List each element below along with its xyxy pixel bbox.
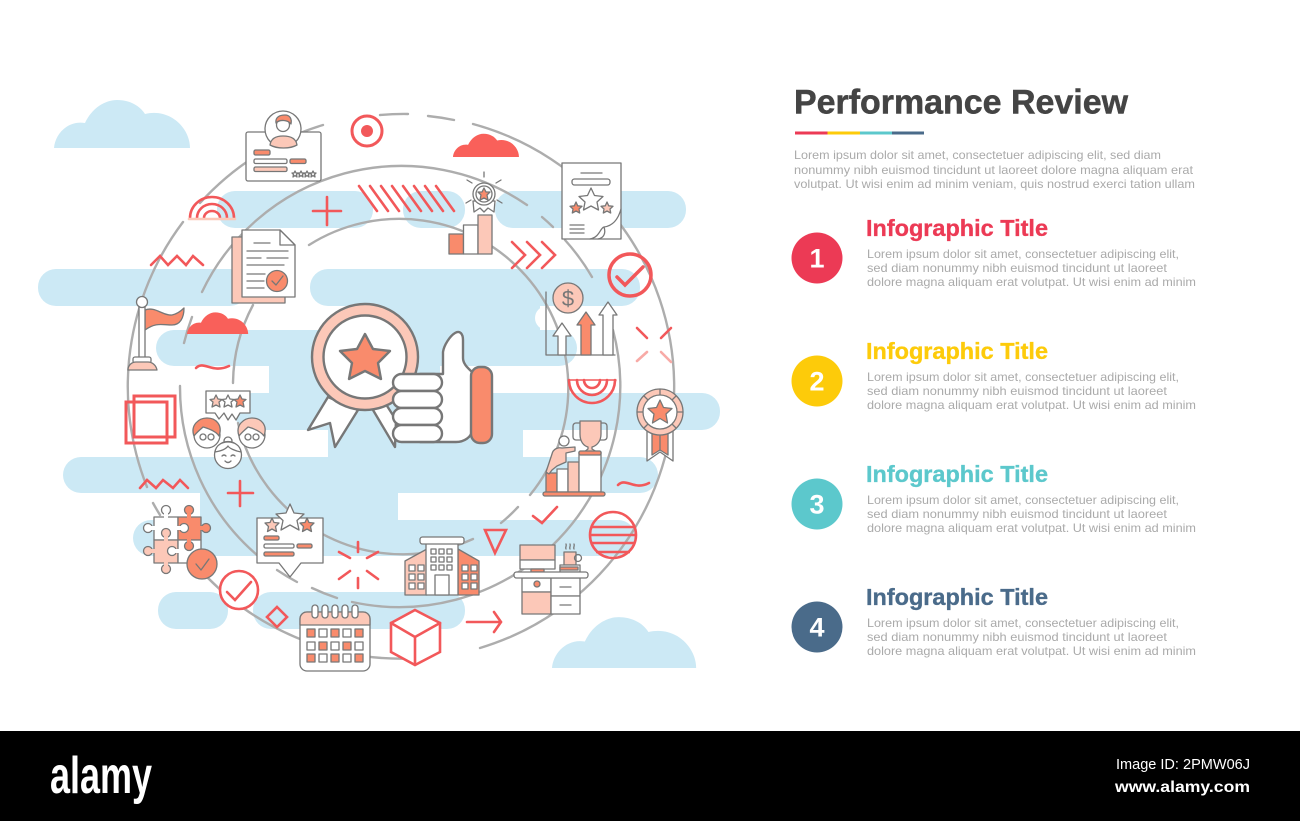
intro paragraph: Lorem ipsum dolor sit amet, consectetuer adipiscing elit, sed diam (794, 148, 1161, 162)
number badge 2: 2 (809, 366, 825, 396)
item 1 text: sed diam nonummy nibh euismod tincidunt ut laoreet (867, 261, 1168, 275)
icon: zigzag top (151, 256, 203, 265)
white cut-out bars (150, 306, 655, 520)
item 4 title: Infographic Title (866, 584, 1048, 610)
item 1 (792, 215, 1196, 289)
item 1 text: dolore magna aliquam erat volutpat. Ut wisi enim ad minim (867, 275, 1196, 289)
icon: profile card (246, 111, 321, 181)
item 2 (792, 338, 1196, 412)
number badge 1: 1 (809, 244, 825, 274)
number badge 3: 3 (809, 490, 825, 520)
footer band (0, 731, 1300, 821)
number badge 4 (792, 602, 842, 652)
icon: arrow (467, 612, 501, 632)
item 2 text (867, 370, 1196, 412)
item 3 text: dolore magna aliquam erat volutpat. Ut wisi enim ad minim (867, 521, 1196, 535)
badge medal (312, 304, 418, 410)
footer logo: alamy (50, 747, 152, 805)
icon: trophy podium (543, 421, 607, 496)
thumbs up hand (393, 332, 492, 443)
icon: growth chart with coin: $ (562, 286, 574, 311)
number badge 3 (792, 478, 842, 530)
icon: office building (405, 537, 479, 595)
heading underline (795, 132, 924, 134)
icon: office desk (514, 544, 588, 614)
item 2 text: sed diam nonummy nibh euismod tincidunt ut laoreet (867, 384, 1168, 398)
icon: sparkle burst (339, 542, 378, 588)
icon: zigzag bottom (140, 480, 188, 488)
icon: growth chart with coin (546, 283, 617, 355)
cloud: top left (54, 100, 190, 148)
icon: tilde left (196, 365, 229, 369)
icon: diagonal hatching (359, 186, 454, 211)
item 1 title: Infographic Title (866, 215, 1048, 241)
icon: chevrons (512, 242, 555, 268)
intro paragraph (794, 148, 1195, 191)
icon: squares (126, 396, 175, 443)
item 4 text: dolore magna aliquam erat volutpat. Ut wisi enim ad minim (867, 644, 1196, 658)
item 3 text: Lorem ipsum dolor sit amet, consectetuer adipiscing elit, (867, 493, 1179, 507)
cloud: bottom right (552, 617, 696, 668)
icon: striped circle (590, 512, 636, 558)
number badge 4: 4 (809, 612, 825, 642)
icon: diamond (267, 607, 287, 627)
icon: award with bars (449, 172, 502, 254)
background blue bars (38, 191, 720, 629)
icon: puzzle (144, 506, 217, 579)
icon: rainbow arcs (189, 197, 235, 219)
icon: red cloud left (187, 312, 248, 334)
icon: check circle bottom (220, 571, 258, 609)
icon: check mark (533, 507, 557, 523)
icon: certificate (562, 163, 621, 239)
icon: tilde right (618, 482, 649, 486)
icon: red cloud top (453, 134, 519, 157)
item 1 text: Lorem ipsum dolor sit amet, consectetuer adipiscing elit, (867, 247, 1179, 261)
icon: triangle (485, 530, 506, 553)
icon: medal right (637, 389, 683, 461)
icon: half target arcs (569, 380, 616, 403)
footer url: www.alamy.com (1114, 779, 1250, 796)
item 2 text: Lorem ipsum dolor sit amet, consectetuer adipiscing elit, (867, 370, 1179, 384)
item 3 text (867, 493, 1196, 535)
item 4 text: sed diam nonummy nibh euismod tincidunt ut laoreet (867, 630, 1168, 644)
item 4 text (867, 616, 1196, 658)
icon: flag (128, 296, 184, 370)
icon: calendar (300, 605, 370, 671)
icon: document with check (232, 230, 295, 303)
icon: plus top (313, 197, 341, 225)
item 1 text (867, 247, 1196, 289)
item 4 (792, 584, 1196, 658)
icon: check circle right (609, 254, 651, 296)
number badge 1 (792, 232, 842, 284)
concentric rings (128, 114, 674, 659)
item 2 title: Infographic Title (866, 338, 1048, 364)
icon: plus bottom (228, 481, 253, 506)
item 2 text: dolore magna aliquam erat volutpat. Ut wisi enim ad minim (867, 398, 1196, 412)
footer image id: Image ID: 2PMW06J (1116, 756, 1250, 773)
icon: review card (257, 504, 323, 577)
icon: target (352, 116, 382, 146)
central badge with thumbs up (308, 304, 492, 447)
item 3 title: Infographic Title (866, 461, 1048, 487)
badge ribbon (308, 397, 396, 447)
item 3 (792, 461, 1196, 535)
item 4 text: Lorem ipsum dolor sit amet, consectetuer adipiscing elit, (867, 616, 1179, 630)
intro paragraph: volutpat. Ut wisi enim ad minim veniam, quis nostrud exerci tation ullam (794, 177, 1195, 191)
icon: sparkle cross (637, 328, 671, 362)
heading: Performance Review: Performance Review (794, 84, 1129, 122)
item 3 text: sed diam nonummy nibh euismod tincidunt ut laoreet (867, 507, 1168, 521)
icon: cube (391, 610, 440, 665)
number badge 2 (792, 356, 842, 406)
intro paragraph: nonummy nibh euismod tincidunt ut laoreet dolore magna aliquam erat (794, 163, 1194, 177)
icon: rated people (193, 391, 265, 468)
